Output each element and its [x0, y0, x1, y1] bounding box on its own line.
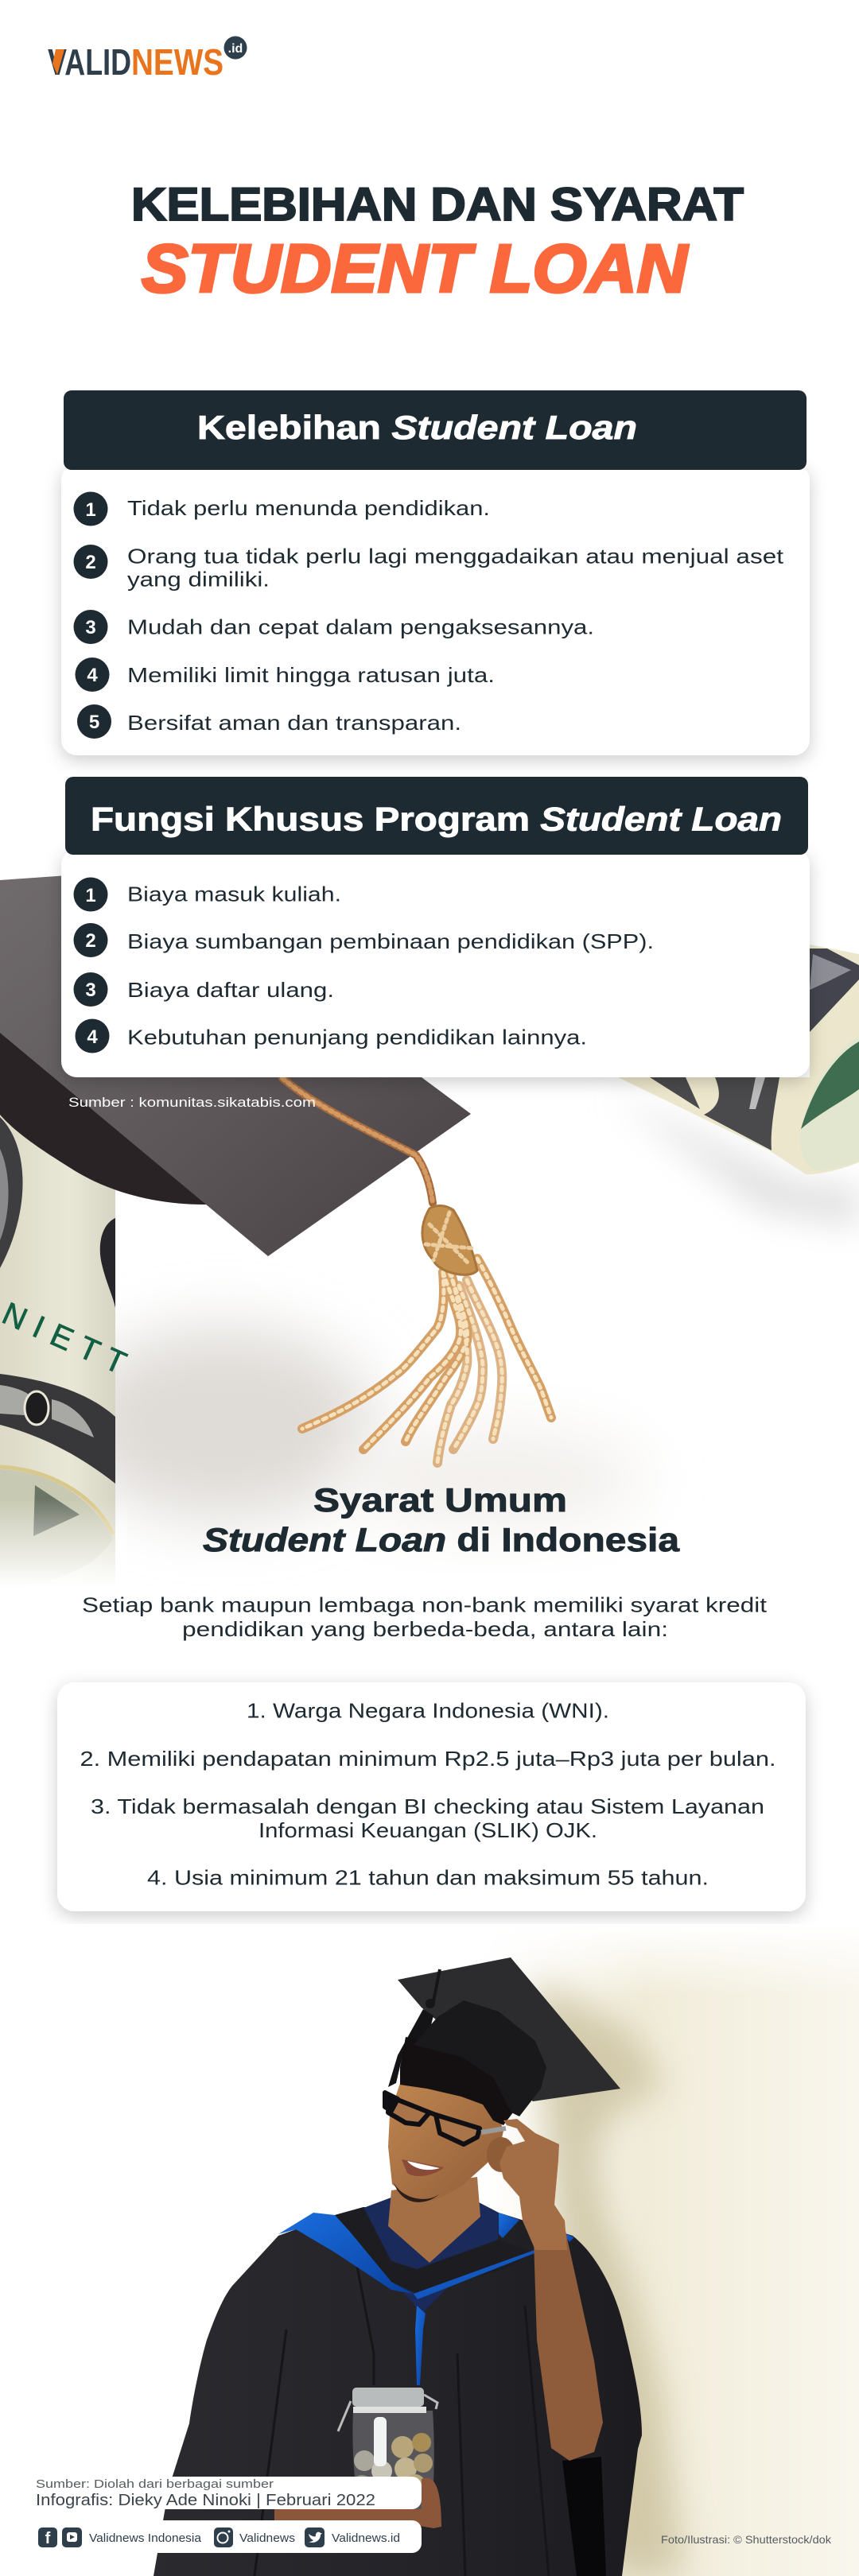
hand at temple	[499, 2119, 567, 2250]
logo: Validnews.id	[48, 37, 247, 83]
blue satin trim	[278, 2213, 574, 2385]
shadow on wall	[533, 1980, 684, 2576]
left money roll	[0, 1113, 131, 1588]
panel body	[61, 464, 810, 755]
item 2: Orang tua tidak perlu lagi menggadaikan atau menjual aset	[127, 544, 784, 568]
right arm	[534, 2224, 603, 2461]
hood collar	[335, 2207, 534, 2294]
shirt	[363, 2196, 499, 2314]
item 5	[77, 704, 461, 739]
item 2: Biaya sumbangan pembinaan pendidikan (SPP).	[127, 929, 654, 953]
panel: Kelebihan Student Loan	[61, 390, 810, 755]
title: STUDENT LOAN	[142, 231, 689, 307]
logo: Validnews.id: NEWS	[131, 41, 223, 83]
credit box: sumber: Sumber: Diolah dari berbagai sumber	[36, 2477, 274, 2491]
requirement 3: 3. Tidak bermasalah dengan BI checking atau Sistem Layanan	[91, 1794, 764, 1818]
item 4: Memiliki limit hingga ratusan juta.	[127, 663, 495, 687]
wall background	[0, 1924, 859, 2576]
item 5: 5	[89, 712, 99, 733]
mortarboard underside	[0, 1026, 211, 1205]
title: KELEBIHAN DAN SYARAT	[131, 179, 744, 231]
panel heading	[65, 777, 808, 855]
item 2: 2	[85, 930, 96, 952]
item 2	[73, 923, 654, 957]
item 2: 2	[85, 552, 96, 573]
photo: graduate holding coin jar	[0, 1924, 859, 2576]
social label: Validnews: Validnews	[239, 2531, 295, 2545]
icon: facebook: f	[45, 2530, 51, 2547]
requirement 2: 2. Memiliki pendapatan minimum Rp2.5 juta–Rp3 juta per bulan.	[80, 1747, 776, 1771]
icon: twitter	[305, 2528, 325, 2547]
item 1: Biaya masuk kuliah.	[127, 883, 341, 906]
beard	[394, 2182, 439, 2202]
item 4: Kebutuhan penunjang pendidikan lainnya.	[127, 1026, 587, 1049]
glasses	[385, 2093, 506, 2144]
item 4	[75, 658, 495, 692]
social label: Validnews Indonesia: Validnews Indonesia	[89, 2531, 202, 2545]
item 3	[73, 972, 334, 1007]
heading: Syarat Umum	[203, 1481, 680, 1558]
panel body	[61, 849, 810, 1077]
mortarboard plate	[398, 1957, 620, 2101]
item 1	[73, 878, 341, 911]
gown folds	[255, 2250, 606, 2576]
icon: youtube	[62, 2528, 82, 2547]
hair	[400, 2037, 513, 2125]
logo: Validnews.id: .id	[228, 42, 243, 56]
item 4: 4	[87, 1026, 98, 1048]
panel: syarat list	[57, 1682, 806, 1911]
requirement 1: 1. Warga Negara Indonesia (WNI).	[247, 1698, 609, 1722]
panel: Fungsi Khusus Program Student Loan	[61, 777, 810, 1077]
item 2: yang dimiliki.	[127, 568, 270, 592]
mortarboard top	[0, 875, 471, 1256]
photo credit: Foto/Ilustrasi: © Shutterstock/dok	[661, 2533, 832, 2546]
panel heading: Kelebihan Student Loan	[197, 409, 637, 446]
right money roll	[618, 945, 859, 1174]
panel heading	[64, 390, 807, 470]
item 4	[75, 1019, 587, 1053]
face	[388, 2083, 503, 2202]
text block: intro	[82, 1593, 768, 1641]
icon: instagram	[214, 2528, 233, 2547]
ear	[487, 2137, 515, 2172]
text block: intro: Setiap bank maupun lembaga non-bank memiliki syarat kredit	[82, 1593, 768, 1617]
item 1	[73, 491, 490, 526]
image credit: komunitas.sikatabis.com: Sumber : komunitas.sikatabis.com	[68, 1095, 316, 1110]
item 3: Biaya daftar ulang.	[127, 978, 334, 1002]
item 4: 4	[87, 665, 98, 686]
item 2	[73, 544, 784, 592]
requirement 4: 4. Usia minimum 21 tahun dan maksimum 55 tahun.	[147, 1865, 709, 1889]
heading: Syarat Umum: Student Loan di Indonesia	[203, 1521, 680, 1558]
graduation cap tassel	[388, 1969, 440, 2087]
gown	[154, 2207, 642, 2576]
credit box: sumber	[29, 2477, 422, 2509]
requirement 3	[91, 1794, 764, 1842]
item 3: 3	[85, 617, 96, 638]
mouth	[402, 2159, 444, 2176]
panel heading: Fungsi Khusus Program Student Loan	[91, 800, 782, 838]
item 3: Mudah dan cepat dalam pengaksesannya.	[127, 615, 594, 639]
item 1: 1	[85, 499, 96, 521]
photo shadow on table	[72, 1093, 859, 1527]
item 5: Bersifat aman dan transparan.	[127, 711, 461, 735]
title	[131, 179, 744, 307]
neck	[388, 2177, 480, 2263]
heading: Syarat Umum: Syarat Umum	[313, 1481, 567, 1519]
text block: intro: pendidikan yang berbeda-beda, antara lain:	[182, 1617, 668, 1641]
tassel	[282, 1078, 551, 1463]
logo: Validnews.id: VALID	[48, 41, 131, 83]
skull cap	[414, 2000, 546, 2116]
icon: facebook	[38, 2528, 57, 2547]
teeth	[407, 2161, 440, 2170]
item 3	[73, 610, 594, 644]
credit box: sumber: Infografis: Dieky Ade Ninoki | Februari 2022	[36, 2492, 375, 2509]
social label: Validnews.id: Validnews.id	[332, 2531, 400, 2545]
left money roll: N I E T T	[0, 1296, 131, 1381]
coin jar	[338, 2388, 437, 2519]
social box	[29, 2520, 422, 2553]
item 1: 1	[85, 885, 96, 906]
item 1: Tidak perlu menunda pendidikan.	[127, 496, 490, 520]
item 3: 3	[85, 980, 96, 1001]
requirement 3: Informasi Keuangan (SLIK) OJK.	[258, 1818, 597, 1842]
photo: graduation cap and rolled money	[0, 875, 859, 1588]
hand on jar	[274, 2478, 441, 2528]
